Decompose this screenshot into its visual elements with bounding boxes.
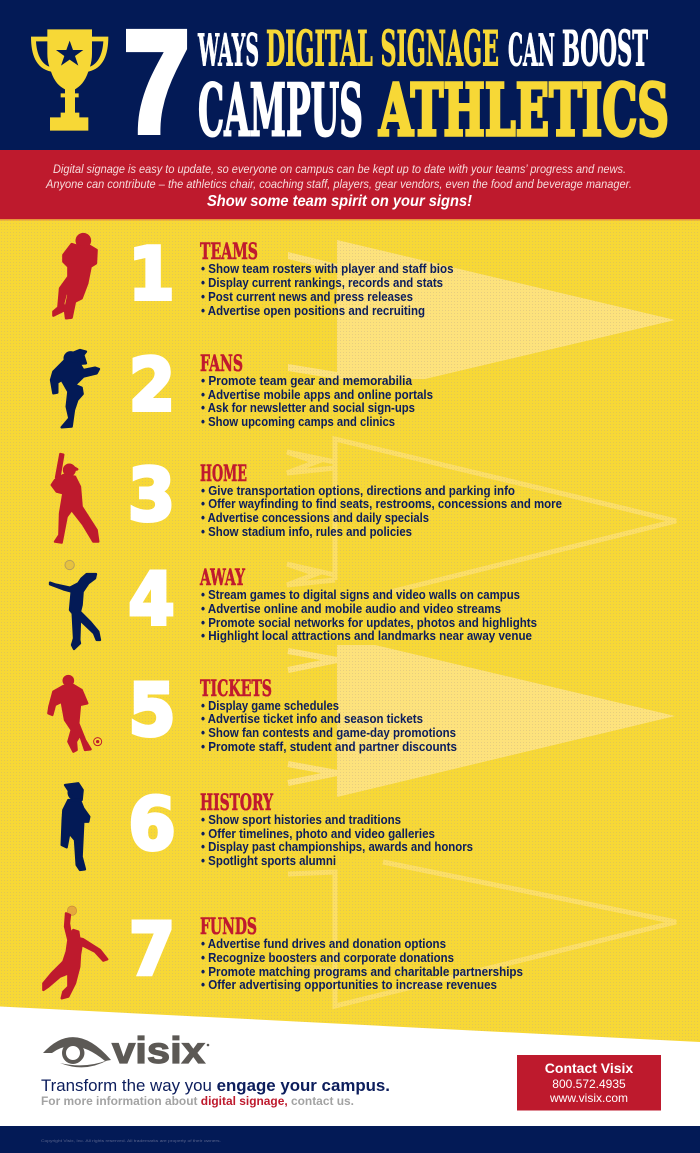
footer navy band bbox=[0, 1126, 700, 1153]
logo: visix bbox=[43, 1030, 209, 1071]
list: • Advertise online and mobile audio and video streams bbox=[201, 601, 501, 616]
number 1: 1 bbox=[128, 232, 174, 316]
red intro band: Anyone can contribute – the athletics chair, coaching staff, players, gear vendors, even the food and beverage manager. bbox=[45, 177, 632, 191]
tagline: Transform the way you engage your campus. bbox=[41, 1076, 390, 1095]
list: • Advertise open positions and recruiting bbox=[201, 303, 425, 318]
list: • Advertise mobile apps and online portals bbox=[201, 387, 433, 402]
section 3: home bbox=[52, 453, 562, 543]
section 6: history bbox=[62, 782, 473, 870]
contact note: For more information about digital signage, contact us. bbox=[41, 1094, 354, 1108]
list: • Post current news and press releases bbox=[201, 289, 413, 304]
icon: trophy bbox=[31, 29, 108, 131]
list: • Promote matching programs and charitable partnerships bbox=[201, 964, 523, 979]
list bbox=[201, 587, 537, 643]
number 2: 2 bbox=[129, 343, 175, 427]
pennant: outline lower bbox=[288, 862, 676, 1006]
icon: basketball player bbox=[43, 906, 107, 998]
section 7: funds bbox=[43, 906, 523, 998]
heading: FUNDS bbox=[200, 914, 257, 940]
background texture bbox=[0, 220, 700, 1050]
list bbox=[201, 261, 454, 318]
icon: baseball batter bbox=[52, 454, 98, 543]
heading: TEAMS bbox=[200, 239, 258, 265]
section 1: teams bbox=[53, 232, 453, 318]
number 7: 7 bbox=[129, 907, 175, 991]
intro call to action: Show some team spirit on your signs! bbox=[207, 193, 472, 210]
list: • Offer advertising opportunities to increase revenues bbox=[201, 977, 497, 992]
list: • Give transportation options, directions and parking info bbox=[201, 483, 515, 498]
list: • Promote social networks for updates, photos and highlights bbox=[201, 615, 537, 630]
icon: runner bbox=[62, 783, 89, 870]
header band bbox=[0, 0, 700, 162]
list: • Promote team gear and memorabilia bbox=[201, 373, 413, 388]
list: • Advertise concessions and daily specials bbox=[201, 510, 429, 525]
list: • Show team rosters with player and staff bios bbox=[201, 261, 454, 276]
list bbox=[201, 483, 562, 539]
heading: FANS bbox=[200, 351, 243, 377]
list: • Display current rankings, records and stats bbox=[201, 275, 443, 290]
list: • Show sport histories and traditions bbox=[201, 812, 401, 827]
list bbox=[201, 812, 473, 868]
section 4: away bbox=[50, 557, 537, 649]
contact box: 800.572.4935 bbox=[552, 1077, 626, 1091]
title line 1: WAYS bbox=[198, 26, 259, 77]
heading: AWAY bbox=[199, 565, 245, 591]
contact box bbox=[517, 1055, 661, 1110]
logo: visix: visix bbox=[112, 1030, 205, 1071]
list bbox=[201, 373, 433, 429]
list: • Ask for newsletter and social sign-ups bbox=[201, 400, 415, 415]
list: • Advertise fund drives and donation options bbox=[201, 936, 446, 951]
list bbox=[201, 698, 457, 754]
pennant: solid upper bbox=[288, 240, 675, 379]
title line 2: CAMPUS bbox=[198, 68, 363, 152]
number 4: 4 bbox=[128, 557, 174, 641]
section 5: tickets bbox=[48, 668, 457, 754]
icon: soccer player bbox=[48, 676, 102, 752]
list: • Display game schedules bbox=[201, 698, 339, 713]
number 6: 6 bbox=[128, 782, 176, 866]
title line 1: CAN bbox=[508, 26, 555, 77]
list: • Offer wayfinding to find seats, restrooms, concessions and more bbox=[201, 496, 562, 511]
heading: HISTORY bbox=[200, 790, 273, 816]
number 5: 5 bbox=[128, 668, 176, 752]
pennant: solid lower bbox=[288, 645, 675, 797]
heading: TICKETS bbox=[200, 676, 272, 702]
list: • Offer timelines, photo and video galleries bbox=[201, 826, 435, 841]
footer navy band: Copyright Visix, Inc. All rights reserved. All trademarks are property of their owners. bbox=[41, 1139, 221, 1143]
list: • Spotlight sports alumni bbox=[201, 853, 336, 868]
list: • Display past championships, awards and honors bbox=[201, 839, 473, 854]
icon: football player bbox=[53, 234, 97, 318]
icon: kicker bbox=[51, 350, 99, 427]
footer white panel bbox=[0, 1006, 700, 1127]
section 2: fans bbox=[51, 343, 433, 429]
number 3: 3 bbox=[128, 453, 175, 537]
red intro band bbox=[0, 150, 700, 219]
list: • Show upcoming camps and clinics bbox=[201, 414, 395, 429]
list: • Show fan contests and game-day promotions bbox=[201, 725, 456, 740]
list: • Show stadium info, rules and policies bbox=[201, 524, 412, 539]
list: • Stream games to digital signs and video walls on campus bbox=[201, 587, 520, 602]
list: • Highlight local attractions and landmarks near away venue bbox=[201, 628, 532, 643]
contact box: www.visix.com bbox=[549, 1091, 628, 1105]
background: yellow field bbox=[0, 219, 700, 1049]
icon: volleyball player bbox=[50, 560, 100, 649]
list: • Advertise ticket info and season tickets bbox=[201, 711, 423, 726]
pennant: outline upper bbox=[287, 439, 676, 592]
contact box: Contact Visix bbox=[545, 1060, 633, 1076]
heading: HOME bbox=[200, 461, 247, 487]
intro text: Digital signage is easy to update, so everyone on campus can be kept up to date with your teams’ progress and news. bbox=[53, 162, 626, 176]
list: • Promote staff, student and partner discounts bbox=[201, 739, 457, 754]
big number 7: 7 bbox=[124, 2, 189, 162]
list: • Recognize boosters and corporate donations bbox=[201, 950, 454, 965]
list bbox=[201, 936, 523, 992]
